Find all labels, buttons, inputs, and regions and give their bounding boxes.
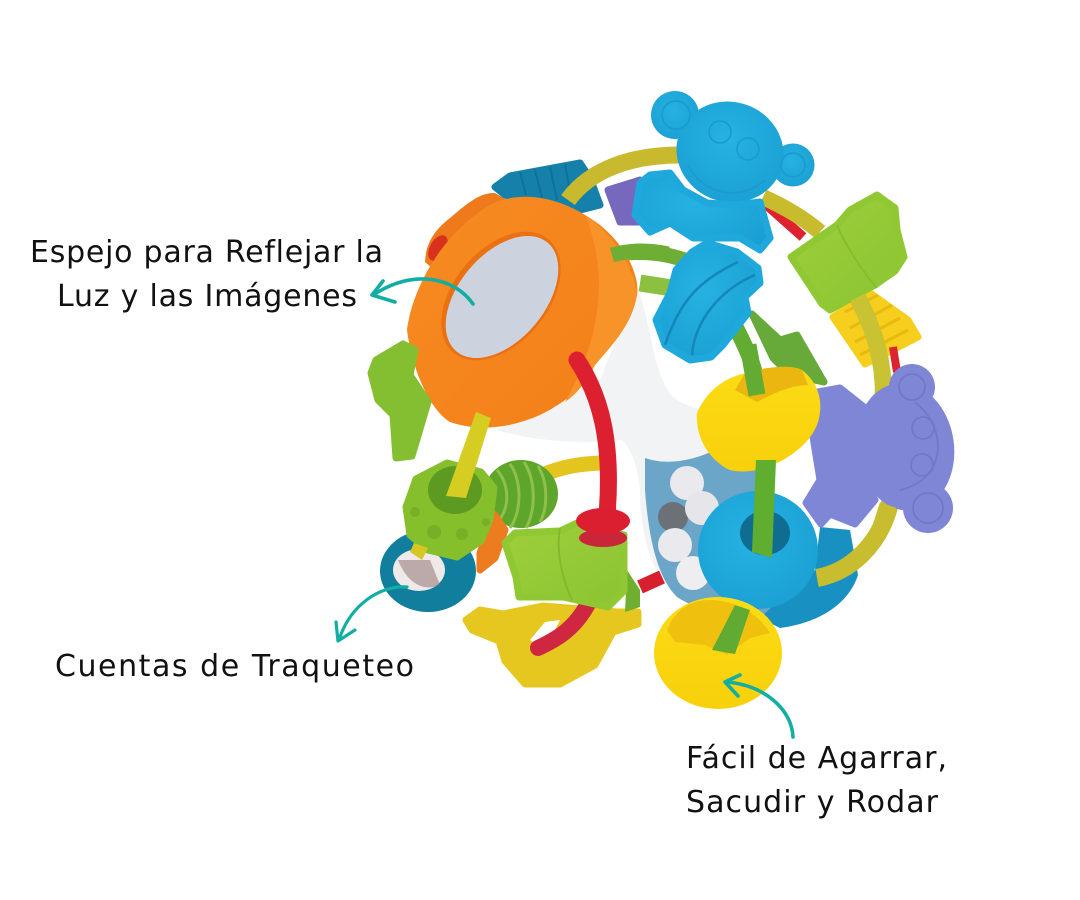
blue bead, lower — [698, 460, 818, 609]
toy illustration — [371, 87, 962, 709]
green ribbed bead — [484, 460, 558, 528]
teal ring, lower left — [380, 530, 476, 612]
yellow bottom bead — [654, 597, 782, 709]
yellow leaf teether, bottom — [466, 606, 638, 684]
blue monkey teether, top — [635, 87, 814, 250]
red bead ring on red tube — [576, 508, 630, 534]
rattle beads inside tube — [658, 466, 719, 590]
clear rattle tube — [497, 287, 800, 618]
label: grip: Fácil de Agarrar, — [686, 741, 947, 776]
label: mirror: Espejo para Reflejar la — [30, 235, 383, 270]
orange connector piece — [480, 514, 505, 570]
label: grip: Sacudir y Rodar — [686, 785, 939, 820]
arrow: to rattle beads label — [336, 587, 407, 641]
tubes and rings — [545, 155, 897, 587]
label: rattle beads: Cuentas de Traqueteo — [55, 649, 414, 684]
blue wavy bead — [656, 243, 760, 360]
green leaf teether, top right — [791, 195, 904, 310]
label: mirror — [30, 235, 383, 314]
back green leaf — [752, 314, 824, 382]
yellow ribbed teether — [833, 293, 918, 364]
mirror — [417, 209, 585, 383]
yellow stub through ring — [410, 543, 428, 560]
label: mirror: Luz y las Imágenes — [57, 279, 357, 314]
back blue bracelet — [760, 527, 858, 628]
arrow: to mirror label — [372, 279, 473, 304]
green tube end on orange — [612, 251, 668, 255]
green butterfly teether — [505, 523, 640, 612]
green bumpy bead — [406, 412, 494, 557]
purple monkey teether — [806, 364, 962, 533]
arrow: to yellow bead — [725, 675, 793, 737]
purple ribbed teether, back — [608, 180, 652, 222]
red tube — [538, 360, 608, 648]
yellow bead, middle — [697, 345, 820, 472]
right yellow-green tube over leaf — [858, 297, 870, 322]
orange mirror housing — [407, 193, 637, 428]
label: grip — [686, 741, 947, 820]
lower yellow tube over monkey arm — [880, 505, 888, 530]
left green leaf — [371, 344, 428, 458]
blue ribbed teether, back — [495, 163, 600, 210]
